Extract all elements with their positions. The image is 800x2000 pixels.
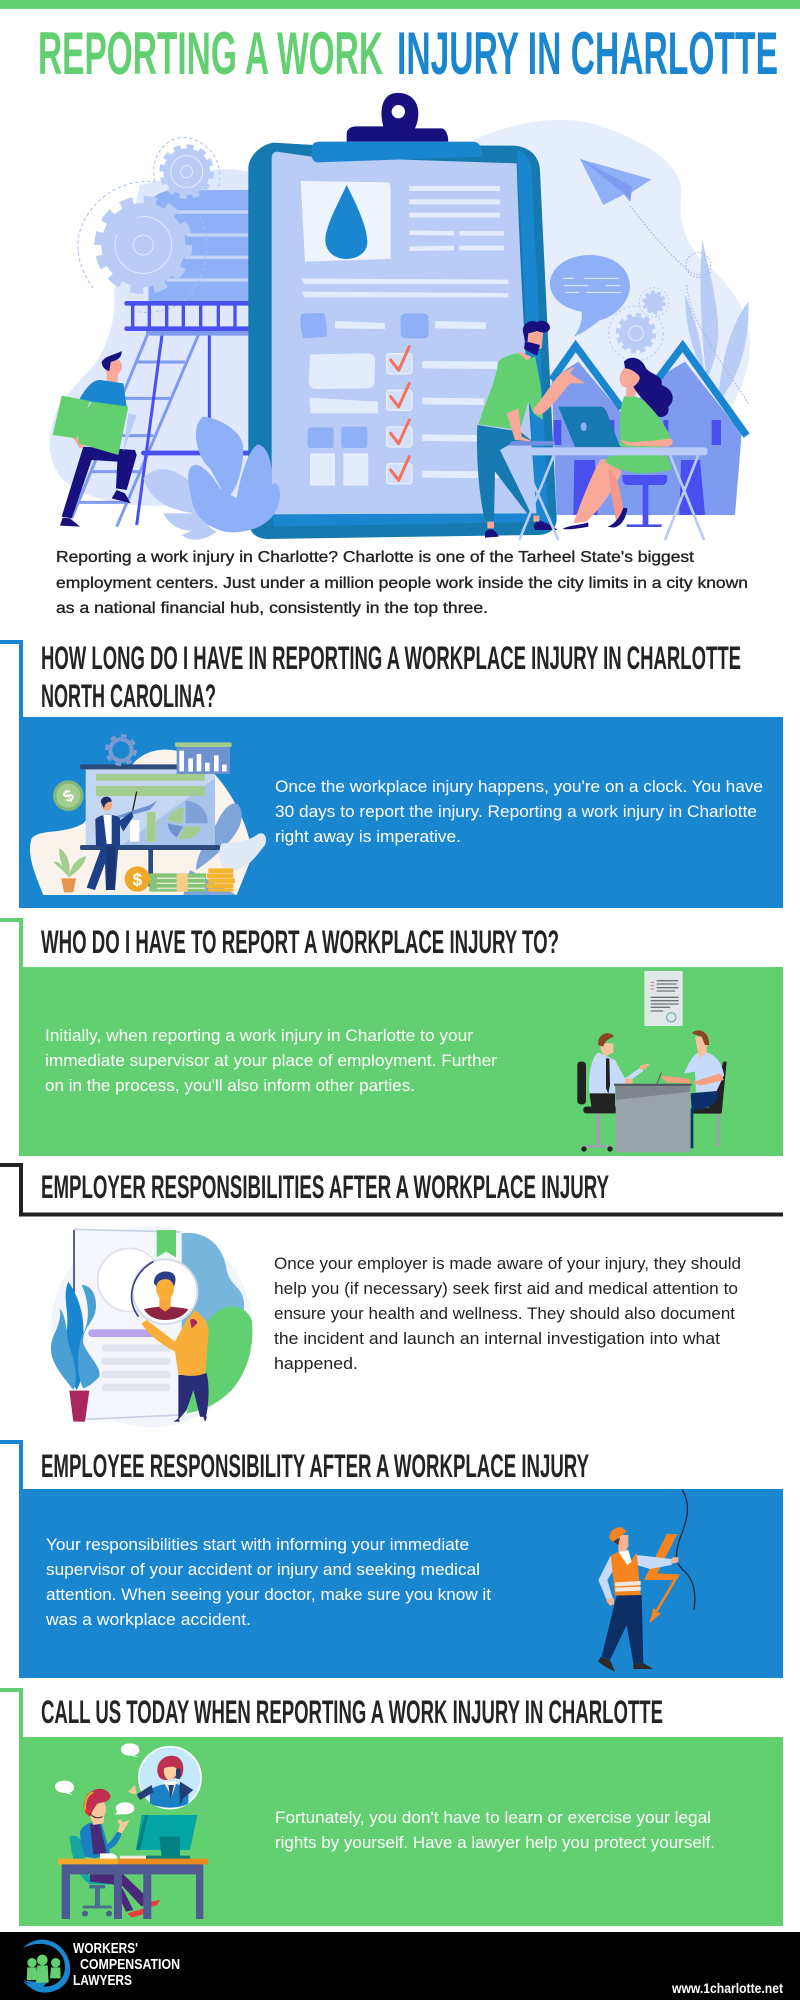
intro paragraph: Reporting a work injury in Charlotte? Charlotte is one of the Tarheel State's biggest [56,549,695,566]
section 5 panel [19,1737,783,1926]
section 5 body text [275,1808,715,1852]
desk and computer [58,1815,208,1919]
small gears and plants [609,240,749,403]
table [503,447,707,540]
section 2 body text [45,1026,497,1095]
section 1 body text [275,777,763,846]
title: REPORTING A WORK [38,20,383,87]
section 1 body text: right away is imperative. [275,827,461,846]
icon: person holding profile magnifier [51,1226,252,1427]
background blobs [50,120,750,515]
section 5 body text: Fortunately, you don't have to learn or exercise your legal [275,1808,711,1827]
section 1 bracket [0,642,21,718]
desk [614,1084,692,1152]
section 5 bracket [0,1690,21,1738]
lightning bolt [644,1534,680,1623]
laptop [558,407,647,447]
section 2 bracket [0,920,21,968]
icon: presenter with charts and money: $ [60,785,78,807]
logo wordmark [73,1941,180,1989]
blue form squares [300,313,429,448]
worker [598,1527,678,1672]
section 1 heading [41,640,741,714]
section 3 body text: Once your employer is made aware of your injury, they should [274,1254,741,1273]
checklist ticks [387,347,412,484]
section 2 panel [19,967,783,1156]
top accent bar [0,0,800,9]
right person on chair [657,1030,727,1148]
section 3 body text: happened. [274,1354,358,1373]
form lines and fields [302,186,511,486]
live wire [676,1490,695,1610]
section 1: how long to report [0,640,783,908]
icon: presenter with charts and money: $ [133,870,143,890]
speech bubble [550,255,630,337]
intro paragraph: employment centers. Just under a million people work inside the city limits in a city known [56,575,748,592]
right-side scene [477,159,749,540]
section 4 body text [45,1535,491,1629]
scaffold and ladder [72,303,250,527]
worker carrying green box [53,351,137,527]
leaves [143,417,243,540]
section 2 body text: immediate supervisor at your place of employment. Further [45,1051,497,1070]
icon: presenter with charts and money [30,736,266,895]
section 3 bracket [0,1165,783,1214]
section 5: call us today [0,1690,783,1926]
section 2 body text: Initially, when reporting a work injury in Charlotte to your [45,1026,473,1045]
clipboard clip [312,93,482,162]
section 1 body text: 30 days to report the injury. Reporting a work injury in Charlotte [275,802,757,821]
seated woman with stool [563,358,673,529]
hero illustration: clipboard, workers and houses [50,93,750,540]
section 5 body text: rights by yourself. Have a lawyer help you protect yourself. [275,1833,715,1852]
section 4 body text: was a workplace accident. [45,1610,251,1629]
intro paragraph: as a national financial hub, consistently in the top three. [56,600,488,617]
intro paragraph [56,549,748,617]
section 3 body text: help you (if necessary) seek first aid and medical attention to [274,1279,738,1298]
section 4: employee responsibility [0,1442,783,1678]
icon: electrician holding live wire [598,1490,695,1672]
logo wordmark: COMPENSATION [80,1957,180,1973]
left person on chair [577,1033,650,1152]
wall document [644,971,683,1026]
section 3 body text: the incident and launch an internal investigation into what [274,1329,720,1348]
client in circle [128,1747,201,1809]
section 4 body text: attention. When seeing your doctor, make sure you know it [46,1585,491,1604]
paper plane [580,159,712,275]
man standing at table [477,321,585,538]
section 1 heading: NORTH CAROLINA? [41,678,216,714]
section 1 body text: Once the workplace injury happens, you're on a clock. You have [275,777,763,796]
section 4 body text: Your responsibilities start with informing your immediate [46,1535,469,1554]
server stack and gears [78,137,253,312]
houses [552,346,747,515]
agent [69,1789,160,1918]
section 4 body text: supervisor of your accident or injury and seeking medical [46,1560,480,1579]
speech bubbles [55,1743,139,1814]
section 3: employer responsibilities [0,1165,783,1427]
icon: call centre agent and client [55,1743,208,1919]
logo wordmark: LAWYERS [73,1973,132,1989]
section 4 bracket [0,1442,21,1490]
section 1 panel [19,717,783,908]
section 3 body text [274,1254,741,1373]
section 4 panel [19,1489,783,1678]
logo wordmark: WORKERS' [73,1941,138,1957]
website url: www.1charlotte.net [671,1980,783,1996]
form photo with water drop [301,181,391,262]
logo icon: hand, arc and people [23,1940,70,1993]
clipboard body [248,93,557,539]
foreground leaf [188,444,280,532]
icon: two people meeting at a desk [577,971,727,1152]
section 2 body text: on in the process, you'll also inform other parties. [45,1076,415,1095]
section 2: who to report to [0,920,783,1156]
footer band [0,1932,800,2000]
section 3 body text: ensure your health and wellness. They should also document [274,1304,735,1323]
